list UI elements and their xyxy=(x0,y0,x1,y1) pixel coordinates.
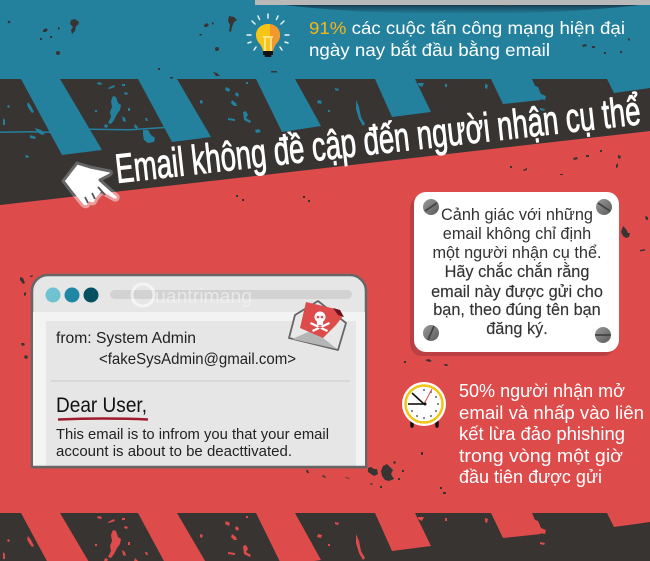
icon: light bulb xyxy=(247,14,289,57)
icon: pointing hand xyxy=(63,163,118,207)
card text: đăng ký. xyxy=(486,320,548,338)
stat text: 50%: đầu tiên được gửi xyxy=(459,466,602,487)
watermark: uantrimang xyxy=(155,286,252,308)
greeting: Dear User, xyxy=(56,394,147,417)
stat text: 91%: 91% các cuộc tấn công mạng hiện đại xyxy=(309,18,625,38)
window dots xyxy=(46,288,98,302)
stat text: 50%: 50% người nhận mở xyxy=(459,380,625,401)
red underline xyxy=(58,418,148,420)
icon: envelope with skull xyxy=(289,301,346,350)
bottom dark banner with red stripes xyxy=(0,513,650,561)
stat text: 50%: kết lừa đảo phishing xyxy=(459,423,625,444)
card text: một người nhận cụ thể. xyxy=(432,244,602,262)
sender: <fakeSysAdmin@gmail.com> xyxy=(99,351,296,368)
top panel edge with shadow xyxy=(255,0,650,14)
card text: email không chỉ định xyxy=(443,225,591,243)
icon: clock xyxy=(402,382,446,426)
stat text: 50% xyxy=(459,380,644,487)
message body xyxy=(56,426,329,460)
message body: account is about to be deacttivated. xyxy=(56,443,292,460)
background: teal upper section xyxy=(0,0,650,100)
sender: from: System Admin xyxy=(56,330,196,347)
sender xyxy=(56,330,296,368)
stat text: 50%: trong vòng một giờ xyxy=(459,445,623,466)
panel: email window xyxy=(32,275,366,467)
card text: email này được gửi cho xyxy=(431,283,603,301)
panel: warning card xyxy=(410,192,619,356)
screws xyxy=(423,199,612,343)
card text: bạn, theo đúng tên bạn xyxy=(433,301,601,319)
address bar xyxy=(110,290,352,299)
stat text: 91% xyxy=(309,18,625,60)
stat text: 50%: email và nhấp vào liên xyxy=(459,402,644,423)
message body: This email is to infrom you that your email xyxy=(56,426,329,443)
card text: Cảnh giác với những xyxy=(441,206,593,224)
stat text: 91%: ngày nay bắt đầu bằng email xyxy=(309,39,550,60)
card text: Hãy chắc chắn rằng xyxy=(445,262,589,281)
card text xyxy=(431,206,603,338)
dark banner with teal stripes xyxy=(0,79,650,205)
